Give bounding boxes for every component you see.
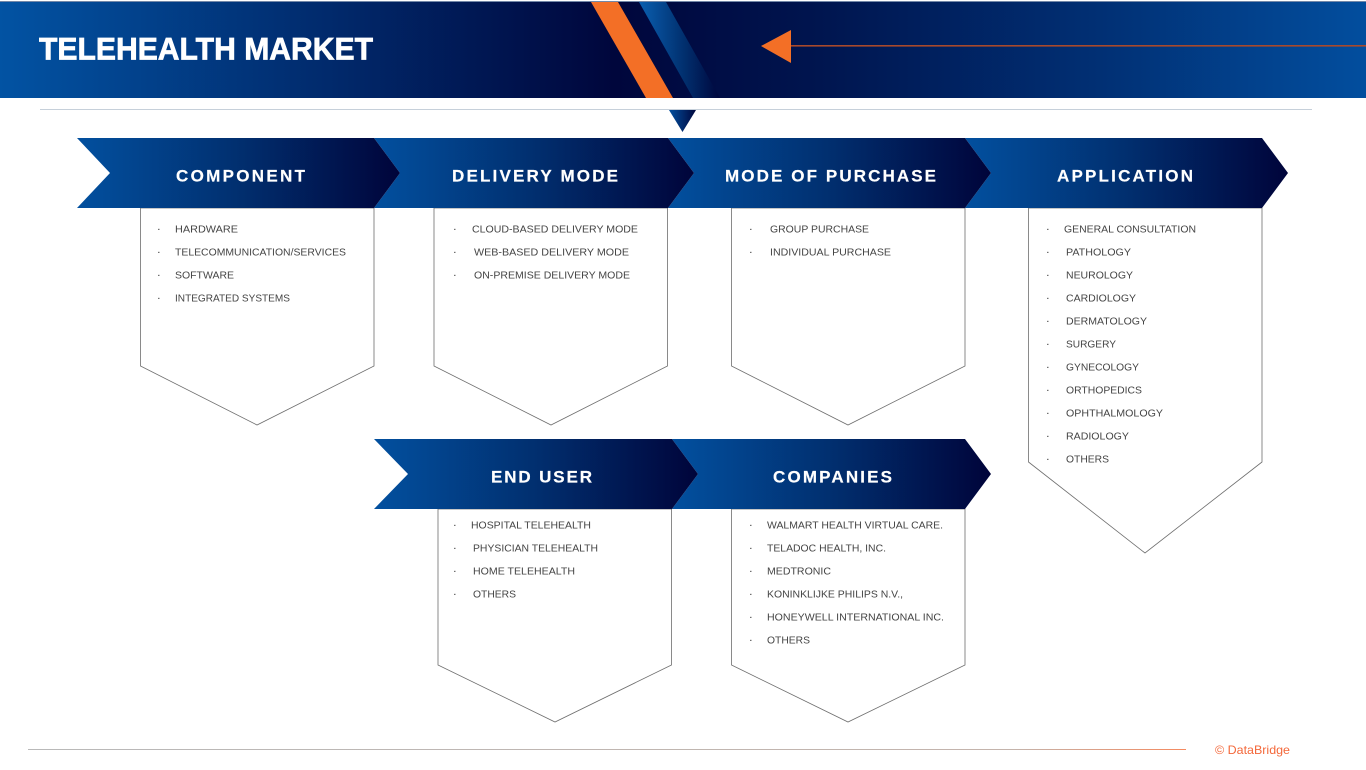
- list: companies: MEDTRONIC: [767, 565, 831, 577]
- decorative orange stripe: [591, 2, 673, 98]
- list: companies: WALMART HEALTH VIRTUAL CARE.: [767, 519, 943, 531]
- list: component: ·: [157, 292, 161, 304]
- list: companies: ·: [749, 611, 753, 623]
- heading: end user: END USER: [491, 468, 592, 487]
- list: application: ·: [1046, 315, 1050, 327]
- list: component: INTEGRATED SYSTEMS: [175, 292, 290, 304]
- list: end user: HOME TELEHEALTH: [473, 565, 575, 577]
- list: component: [157, 223, 346, 304]
- list: application: ·: [1046, 246, 1050, 258]
- heading: mode of purchase: MODE OF PURCHASE: [725, 167, 936, 186]
- list: end user: PHYSICIAN TELEHEALTH: [473, 542, 598, 554]
- list: application: OTHERS: [1066, 453, 1109, 465]
- title: TELEHEALTH MARKET: [39, 30, 373, 66]
- outline: companies: [732, 509, 965, 722]
- list: companies: ·: [749, 519, 753, 531]
- arrow pointing left: [761, 30, 1366, 63]
- chevron: companies: [672, 439, 991, 509]
- list: application: OPHTHALMOLOGY: [1066, 407, 1163, 419]
- list: application: NEUROLOGY: [1066, 269, 1133, 281]
- chevron: mode of purchase: [668, 138, 991, 208]
- panel: companies: [672, 439, 991, 722]
- list: delivery mode: CLOUD-BASED DELIVERY MODE: [472, 223, 638, 235]
- list: delivery mode: ON-PREMISE DELIVERY MODE: [474, 269, 630, 281]
- outline: component: [140, 208, 374, 425]
- list: delivery mode: ·: [453, 246, 457, 258]
- footer credit: © DataBridge: [1215, 743, 1290, 757]
- panel: end user: [374, 439, 698, 722]
- list: application: ORTHOPEDICS: [1066, 384, 1142, 396]
- list: delivery mode: WEB-BASED DELIVERY MODE: [474, 246, 629, 258]
- list: application: ·: [1046, 453, 1050, 465]
- icon: down pointer triangle: [669, 110, 696, 132]
- list: companies: ·: [749, 588, 753, 600]
- list: mode of purchase: [749, 223, 891, 258]
- list: component: ·: [157, 223, 161, 235]
- list: end user: ·: [453, 542, 457, 554]
- list: application: GENERAL CONSULTATION: [1064, 223, 1196, 235]
- chevron: end user: [374, 439, 698, 509]
- list: component: SOFTWARE: [175, 269, 234, 281]
- panel: mode of purchase: [668, 138, 991, 425]
- list: application: ·: [1046, 269, 1050, 281]
- list: companies: OTHERS: [767, 634, 810, 646]
- list: end user: [453, 519, 598, 600]
- outline: mode of purchase: [732, 208, 965, 425]
- panel: component: [77, 138, 400, 425]
- list: companies: TELADOC HEALTH, INC.: [767, 542, 886, 554]
- heading: component: COMPONENT: [176, 167, 306, 186]
- list: application: DERMATOLOGY: [1066, 315, 1147, 327]
- chevron: delivery mode: [374, 138, 694, 208]
- list: delivery mode: ·: [453, 223, 457, 235]
- list: application: PATHOLOGY: [1066, 246, 1131, 258]
- list: component: ·: [157, 246, 161, 258]
- list: mode of purchase: GROUP PURCHASE: [770, 223, 869, 235]
- list: mode of purchase: ·: [749, 246, 753, 258]
- list: application: ·: [1046, 384, 1050, 396]
- heading: application: APPLICATION: [1057, 167, 1193, 186]
- list: application: GYNECOLOGY: [1066, 361, 1139, 373]
- list: application: CARDIOLOGY: [1066, 292, 1136, 304]
- list: delivery mode: ·: [453, 269, 457, 281]
- chevron: component: [77, 138, 400, 208]
- list: application: RADIOLOGY: [1066, 430, 1129, 442]
- list: companies: ·: [749, 565, 753, 577]
- list: application: ·: [1046, 361, 1050, 373]
- list: companies: HONEYWELL INTERNATIONAL INC.: [767, 611, 944, 623]
- chevron: application: [965, 138, 1288, 208]
- outline: delivery mode: [434, 208, 668, 425]
- list: application: ·: [1046, 338, 1050, 350]
- list: component: TELECOMMUNICATION/SERVICES: [175, 246, 346, 258]
- list: end user: ·: [453, 519, 457, 531]
- list: companies: [749, 519, 944, 646]
- list: application: ·: [1046, 223, 1050, 235]
- list: mode of purchase: INDIVIDUAL PURCHASE: [770, 246, 891, 258]
- list: application: [1046, 223, 1196, 465]
- list: companies: ·: [749, 542, 753, 554]
- heading: delivery mode: DELIVERY MODE: [452, 167, 618, 186]
- panel: delivery mode: [374, 138, 694, 425]
- list: end user: ·: [453, 565, 457, 577]
- header banner: [0, 1, 1366, 98]
- list: application: ·: [1046, 407, 1050, 419]
- heading: companies: COMPANIES: [773, 468, 892, 487]
- list: mode of purchase: ·: [749, 223, 753, 235]
- list: application: ·: [1046, 292, 1050, 304]
- list: end user: ·: [453, 588, 457, 600]
- list: component: ·: [157, 269, 161, 281]
- outline: application: [1028, 208, 1262, 553]
- decorative blue stripe: [639, 2, 720, 98]
- list: delivery mode: [453, 223, 638, 281]
- list: companies: KONINKLIJKE PHILIPS N.V.,: [767, 588, 903, 600]
- list: application: SURGERY: [1066, 338, 1116, 350]
- list: end user: HOSPITAL TELEHEALTH: [471, 519, 591, 531]
- panel: application: [965, 138, 1288, 553]
- outline: end user: [438, 509, 672, 722]
- list: application: ·: [1046, 430, 1050, 442]
- list: end user: OTHERS: [473, 588, 516, 600]
- list: companies: ·: [749, 634, 753, 646]
- list: component: HARDWARE: [175, 223, 238, 235]
